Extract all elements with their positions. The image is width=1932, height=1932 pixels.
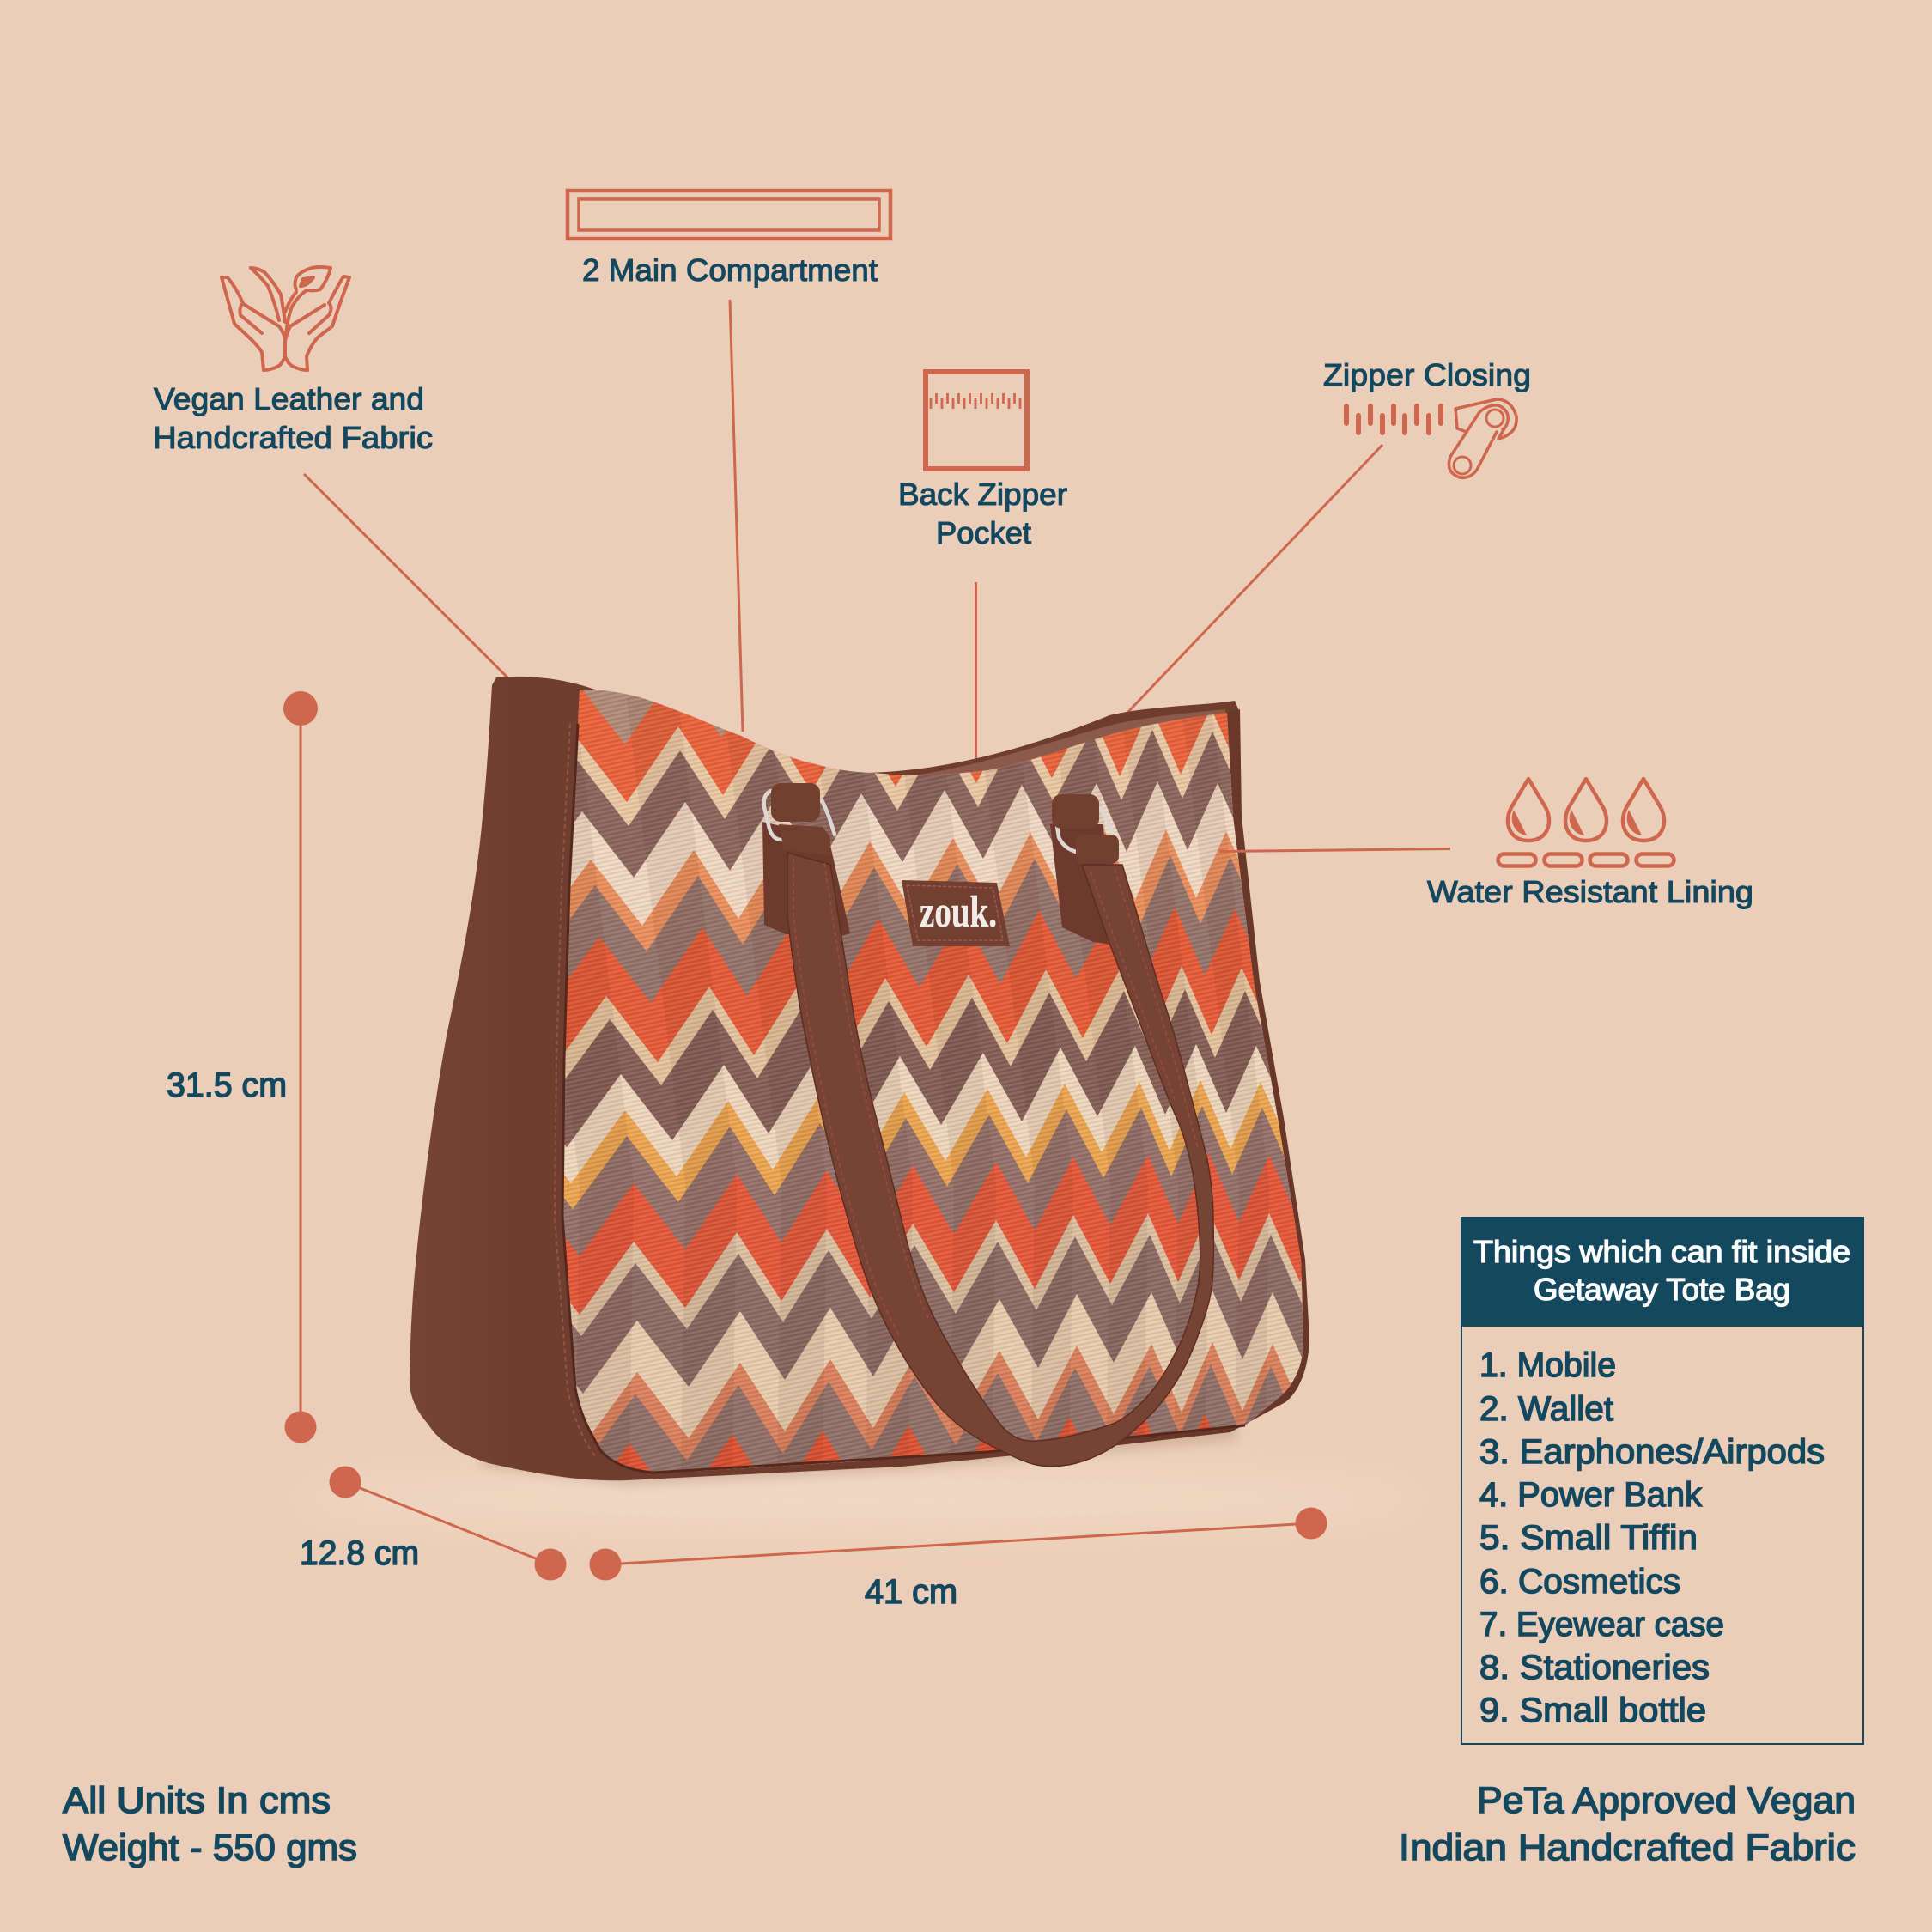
panel heading: Things which can fit inside xyxy=(1473,1234,1850,1269)
item list: 4. Power Bank xyxy=(1479,1476,1703,1514)
floor glow and shadow xyxy=(292,1417,1425,1529)
leader line: zipper closing xyxy=(1127,445,1382,713)
item list xyxy=(1479,1346,1825,1729)
width value: 41 cm xyxy=(865,1573,957,1611)
upper strap loops xyxy=(771,783,1119,864)
panel header xyxy=(1461,1218,1863,1327)
item list: 1. Mobile xyxy=(1479,1346,1616,1384)
dimension: width xyxy=(589,1508,1327,1611)
item list: 3. Earphones/Airpods xyxy=(1479,1433,1825,1471)
leader line: vegan leather xyxy=(304,474,515,685)
label: zipper closing: Zipper Closing xyxy=(1323,357,1531,392)
label: main compartment: 2 Main Compartment xyxy=(582,252,878,288)
strap stitching xyxy=(793,859,1198,1338)
tote bag product image xyxy=(409,677,1309,1480)
logo patch xyxy=(902,880,1010,946)
icon: back zipper pocket xyxy=(926,372,1027,469)
chevron fabric front xyxy=(563,690,1303,1472)
footer note: units and weight: Weight - 550 gms xyxy=(63,1827,357,1868)
icon: main compartment xyxy=(568,191,890,239)
item list: 8. Stationeries xyxy=(1479,1649,1710,1686)
footer note: units and weight: All Units In cms xyxy=(63,1780,331,1821)
depth value: 12.8 cm xyxy=(300,1534,419,1572)
item list: 9. Small bottle xyxy=(1479,1692,1706,1729)
footer note: certification: Indian Handcrafted Fabric xyxy=(1399,1827,1856,1868)
panel: things which can fit inside xyxy=(1461,1218,1863,1744)
fabric seam and stitching xyxy=(555,724,1245,1473)
back panel rim xyxy=(859,701,1240,794)
label: back zipper pocket: Pocket xyxy=(936,515,1031,550)
leader line: back zipper pocket xyxy=(975,582,977,762)
footer note: units and weight xyxy=(63,1780,357,1868)
label: vegan leather xyxy=(153,381,433,455)
metal rings xyxy=(764,791,1114,853)
shoulder straps xyxy=(787,853,1213,1467)
brand logo: zouk. xyxy=(920,888,997,937)
label: water resistant lining: Water Resistant Lining xyxy=(1427,874,1753,909)
label: back zipper pocket xyxy=(898,477,1067,550)
icon: zipper closing xyxy=(1346,399,1516,477)
item list: 5. Small Tiffin xyxy=(1479,1519,1698,1557)
panel heading: Getaway Tote Bag xyxy=(1534,1272,1790,1307)
item list: 2. Wallet xyxy=(1479,1390,1613,1428)
label: vegan leather: Vegan Leather and xyxy=(154,381,424,416)
icon: hands with plant xyxy=(222,267,349,370)
right strap tab xyxy=(1050,824,1112,945)
footer note: certification xyxy=(1399,1780,1856,1868)
panel heading xyxy=(1473,1234,1850,1307)
dimension: height xyxy=(167,691,318,1443)
dimension: depth xyxy=(300,1467,567,1580)
label: vegan leather: Handcrafted Fabric xyxy=(153,420,433,455)
label: back zipper pocket: Back Zipper xyxy=(898,477,1067,512)
height value: 31.5 cm xyxy=(167,1066,287,1104)
item list: 6. Cosmetics xyxy=(1479,1563,1680,1601)
icon: water resistant drops xyxy=(1498,779,1674,866)
leader line: main compartment xyxy=(730,300,743,732)
leader line: water resistant lining xyxy=(1219,848,1450,852)
left strap tab xyxy=(762,822,850,936)
inner lining xyxy=(893,709,1230,794)
bag body and leather side panel xyxy=(410,677,1309,1480)
item list: 7. Eyewear case xyxy=(1479,1606,1724,1643)
footer note: certification: PeTa Approved Vegan xyxy=(1477,1780,1856,1821)
